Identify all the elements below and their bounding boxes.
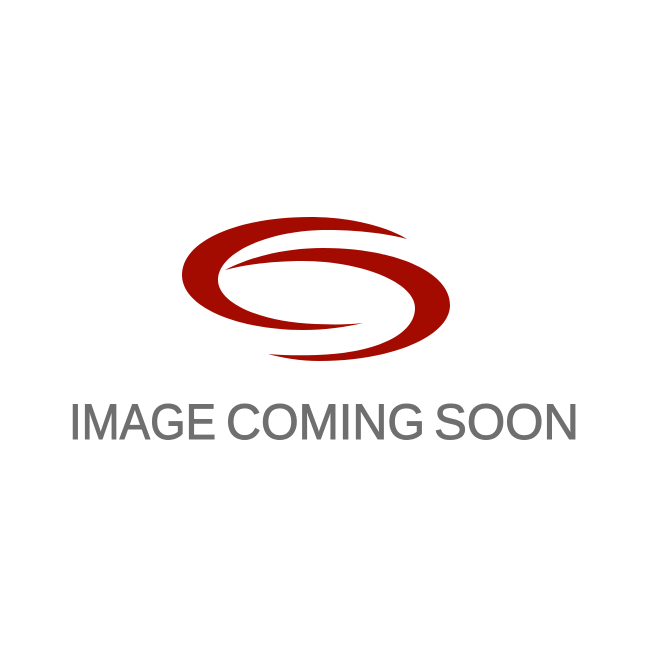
heading: image coming soon: COMING: [226, 394, 425, 450]
icon: red swoosh logo: [182, 217, 450, 361]
heading: image coming soon: SOON: [434, 394, 579, 450]
upper-left swoosh: [182, 217, 407, 330]
heading: image coming soon: [69, 394, 579, 450]
heading: image coming soon: IMAGE: [69, 394, 216, 450]
lower-right swoosh: [225, 248, 450, 361]
